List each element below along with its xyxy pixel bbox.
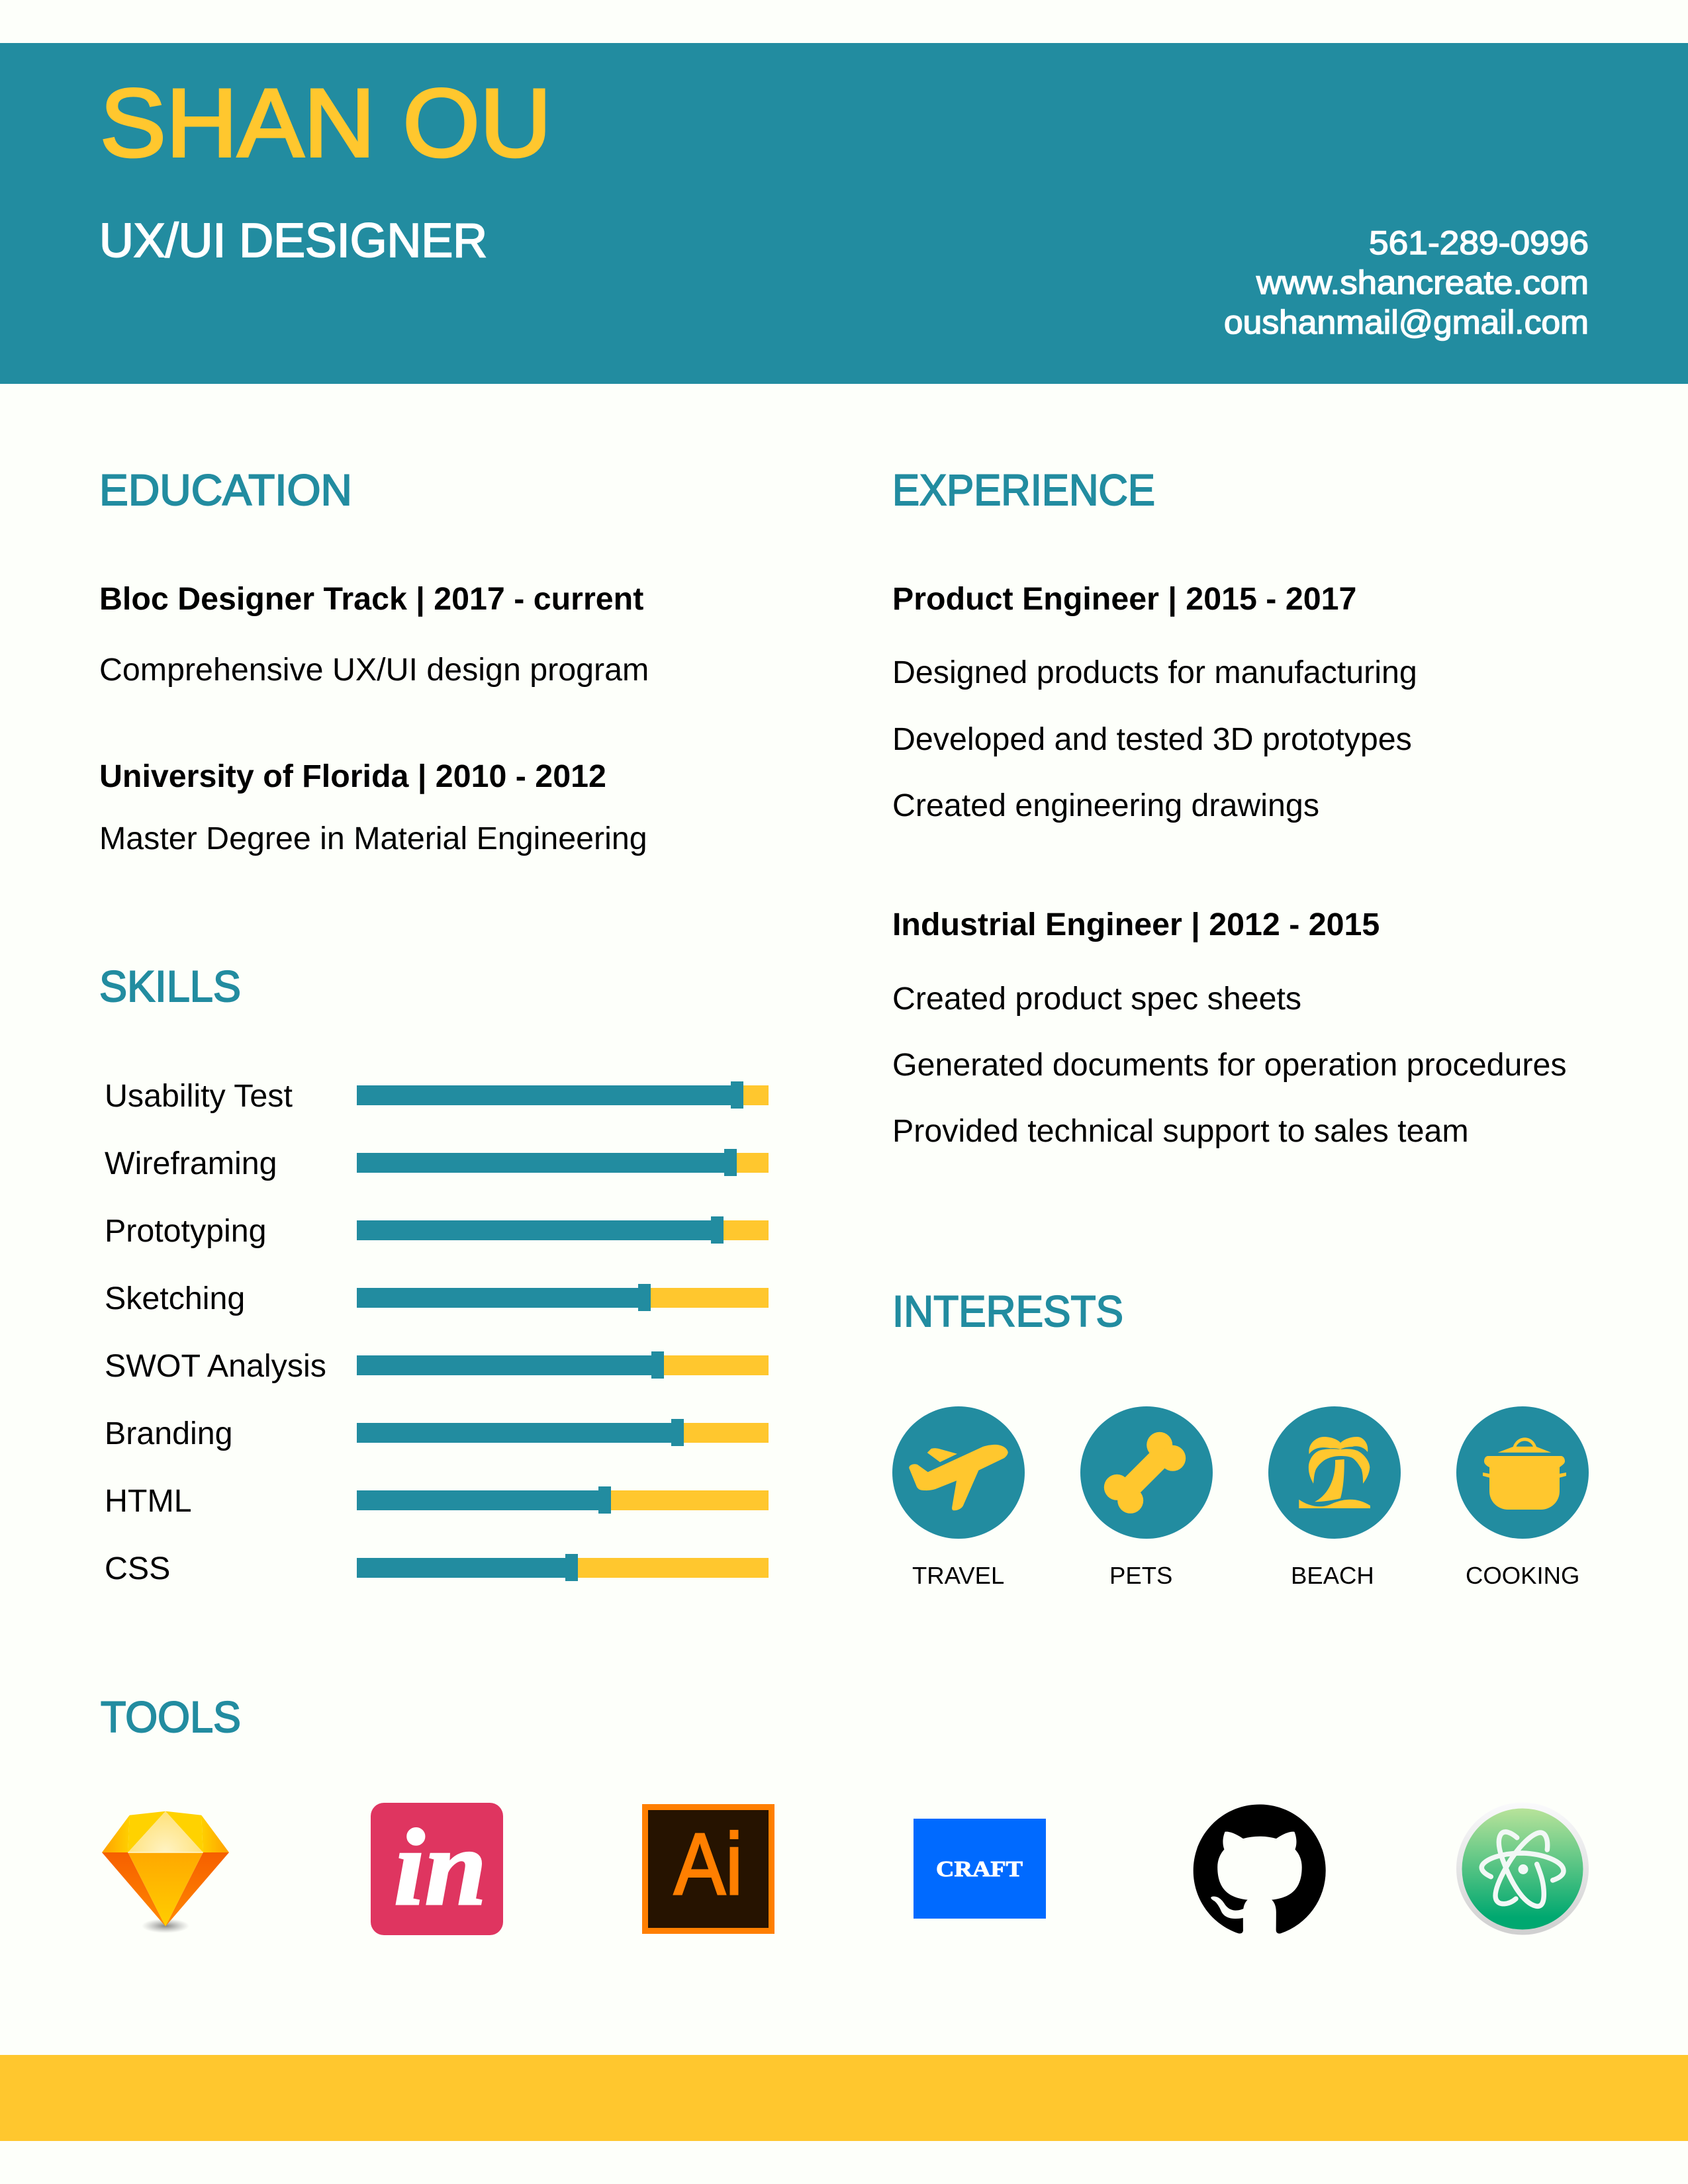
job 1 title: Product Engineer | 2015 - 2017 — [892, 581, 1356, 617]
skill row: prototyping: Prototyping — [105, 1213, 267, 1249]
heading: experience: EXPERIENCE — [892, 465, 1155, 514]
label: cooking: COOKING — [1466, 1562, 1579, 1589]
job title: UX/UI DESIGNER — [99, 214, 487, 267]
panel: interests — [892, 1287, 1589, 1589]
job 2 duty 2: Generated documents for operation procedures — [892, 1047, 1567, 1083]
skill row: wireframing: Wireframing — [105, 1146, 277, 1181]
skill row: prototyping — [105, 1213, 769, 1249]
icon: cooking pot — [1456, 1406, 1589, 1539]
icon: travel plane — [892, 1406, 1025, 1539]
skill row: wireframing — [105, 1146, 769, 1181]
job 2 duty 3: Provided technical support to sales team — [892, 1113, 1469, 1149]
label: travel: TRAVEL — [912, 1562, 1004, 1589]
icon: invision — [371, 1803, 503, 1935]
skill row: sketching — [105, 1281, 769, 1316]
skill row: usability test — [105, 1078, 769, 1114]
icon: pets bone — [1080, 1406, 1213, 1539]
skill row: branding — [105, 1416, 769, 1451]
icon: craft: CRAFT — [936, 1857, 1023, 1882]
contact phone: 561-289-0996 — [1369, 224, 1589, 261]
name title: SHAN OU — [100, 69, 551, 177]
skill row: swot analysis — [105, 1348, 769, 1384]
icon: beach palm tree — [1268, 1406, 1401, 1539]
education entry 1 title: Bloc Designer Track | 2017 - current — [99, 581, 643, 617]
skill row: swot analysis: SWOT Analysis — [105, 1348, 326, 1384]
footer band — [0, 2055, 1688, 2141]
icon: adobe illustrator — [642, 1804, 774, 1934]
icon: sketch diamond — [102, 1811, 229, 1933]
job 2 duty 1: Created product spec sheets — [892, 981, 1301, 1017]
job 1 duty 3: Created engineering drawings — [892, 788, 1319, 823]
icon: invision: in — [394, 1807, 487, 1928]
panel: skills — [99, 962, 769, 1586]
icon: craft — [914, 1819, 1046, 1919]
job 2 title: Industrial Engineer | 2012 - 2015 — [892, 907, 1380, 942]
skill row: css: CSS — [105, 1551, 170, 1586]
heading: tools: TOOLS — [101, 1692, 241, 1741]
heading: skills: SKILLS — [99, 962, 241, 1011]
icon: github — [1194, 1804, 1326, 1934]
skill row: css — [105, 1551, 769, 1586]
heading: education: EDUCATION — [99, 465, 352, 514]
header banner — [0, 43, 1688, 384]
skill row: branding: Branding — [105, 1416, 233, 1451]
skill row: usability test: Usability Test — [105, 1078, 293, 1114]
panel: experience — [892, 465, 1567, 1149]
skill row: html — [105, 1483, 769, 1519]
panel: education — [99, 465, 649, 856]
skill row: html: HTML — [105, 1483, 192, 1519]
job 1 duty 1: Designed products for manufacturing — [892, 655, 1417, 690]
education entry 2 description: Master Degree in Material Engineering — [99, 821, 647, 856]
skill row: sketching: Sketching — [105, 1281, 245, 1316]
contact website: www.shancreate.com — [1256, 264, 1589, 301]
label: beach: BEACH — [1291, 1562, 1374, 1589]
job 1 duty 2: Developed and tested 3D prototypes — [892, 721, 1412, 757]
heading: interests: INTERESTS — [892, 1287, 1123, 1336]
education entry 1 description: Comprehensive UX/UI design program — [99, 652, 649, 688]
contact email: oushanmail@gmail.com — [1224, 304, 1589, 341]
label: pets: PETS — [1109, 1562, 1172, 1589]
icon: adobe illustrator: Ai — [674, 1815, 743, 1913]
icon: atom — [1456, 1803, 1589, 1935]
education entry 2 title: University of Florida | 2010 - 2012 — [99, 758, 606, 794]
panel: tools — [101, 1692, 1589, 1935]
